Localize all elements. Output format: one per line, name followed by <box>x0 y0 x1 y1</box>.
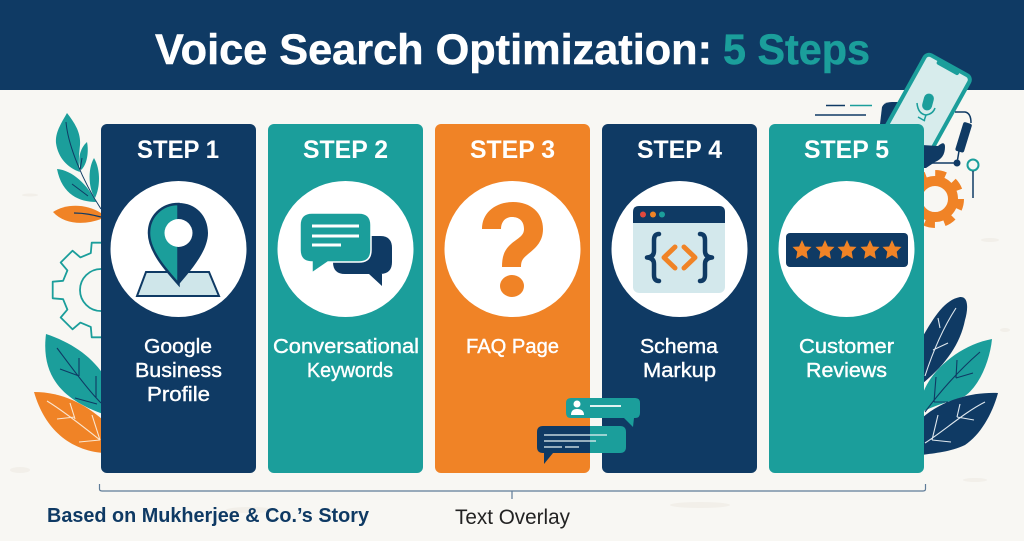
decoration: bottom-left leaves <box>34 334 103 453</box>
step 5 heading: STEP 5 <box>804 136 889 164</box>
bracket <box>100 484 926 499</box>
step 3 heading: STEP 3 <box>470 136 555 164</box>
step 1 label: Google <box>144 335 212 358</box>
step 2 heading: STEP 2 <box>303 136 388 164</box>
title: Voice Search Optimization: <box>155 26 712 74</box>
step 5 label <box>799 335 894 382</box>
step 3 label: FAQ Page <box>466 335 559 358</box>
icon: overlapping chat bubbles <box>537 398 640 464</box>
step 1 label: Profile <box>147 383 210 406</box>
decoration: phone with microphone <box>815 53 978 198</box>
step 1 label: Business <box>135 359 222 382</box>
decoration: teal outline gear <box>53 243 122 337</box>
panel: step 4 <box>602 124 757 473</box>
decoration: bottom-right leaves <box>922 297 998 455</box>
panel: step 1 <box>101 124 256 473</box>
source note: Based on Mukherjee & Co.’s Story <box>47 504 370 527</box>
decoration: top-left foliage <box>53 113 101 223</box>
step 2 label: Conversational <box>273 335 419 358</box>
panel: step 2 <box>268 124 423 473</box>
icon: map pin <box>110 181 246 317</box>
header band <box>0 0 1024 90</box>
step 1 label <box>135 335 222 406</box>
step 1 heading: STEP 1 <box>137 136 219 164</box>
step 2 label: Keywords <box>307 359 393 382</box>
step 2 label <box>273 335 419 382</box>
step 4 label <box>640 335 719 382</box>
step 5 label: Reviews <box>806 359 887 382</box>
icon: chat bubbles <box>278 181 414 317</box>
panel: step 5 <box>769 124 924 473</box>
step 5 label: Customer <box>799 335 894 358</box>
icon: question mark <box>444 181 580 317</box>
panel: step 3 <box>435 124 590 473</box>
step 4 heading: STEP 4 <box>637 136 722 164</box>
icon: five-star rating <box>778 181 914 317</box>
step 4 label: Schema <box>640 335 719 358</box>
step 4 label: Markup <box>643 359 716 382</box>
text overlay caption: Text Overlay <box>455 506 570 529</box>
decoration: orange gear <box>910 174 960 224</box>
title accent: 5 Steps <box>723 26 870 74</box>
icon: code window <box>612 181 748 317</box>
